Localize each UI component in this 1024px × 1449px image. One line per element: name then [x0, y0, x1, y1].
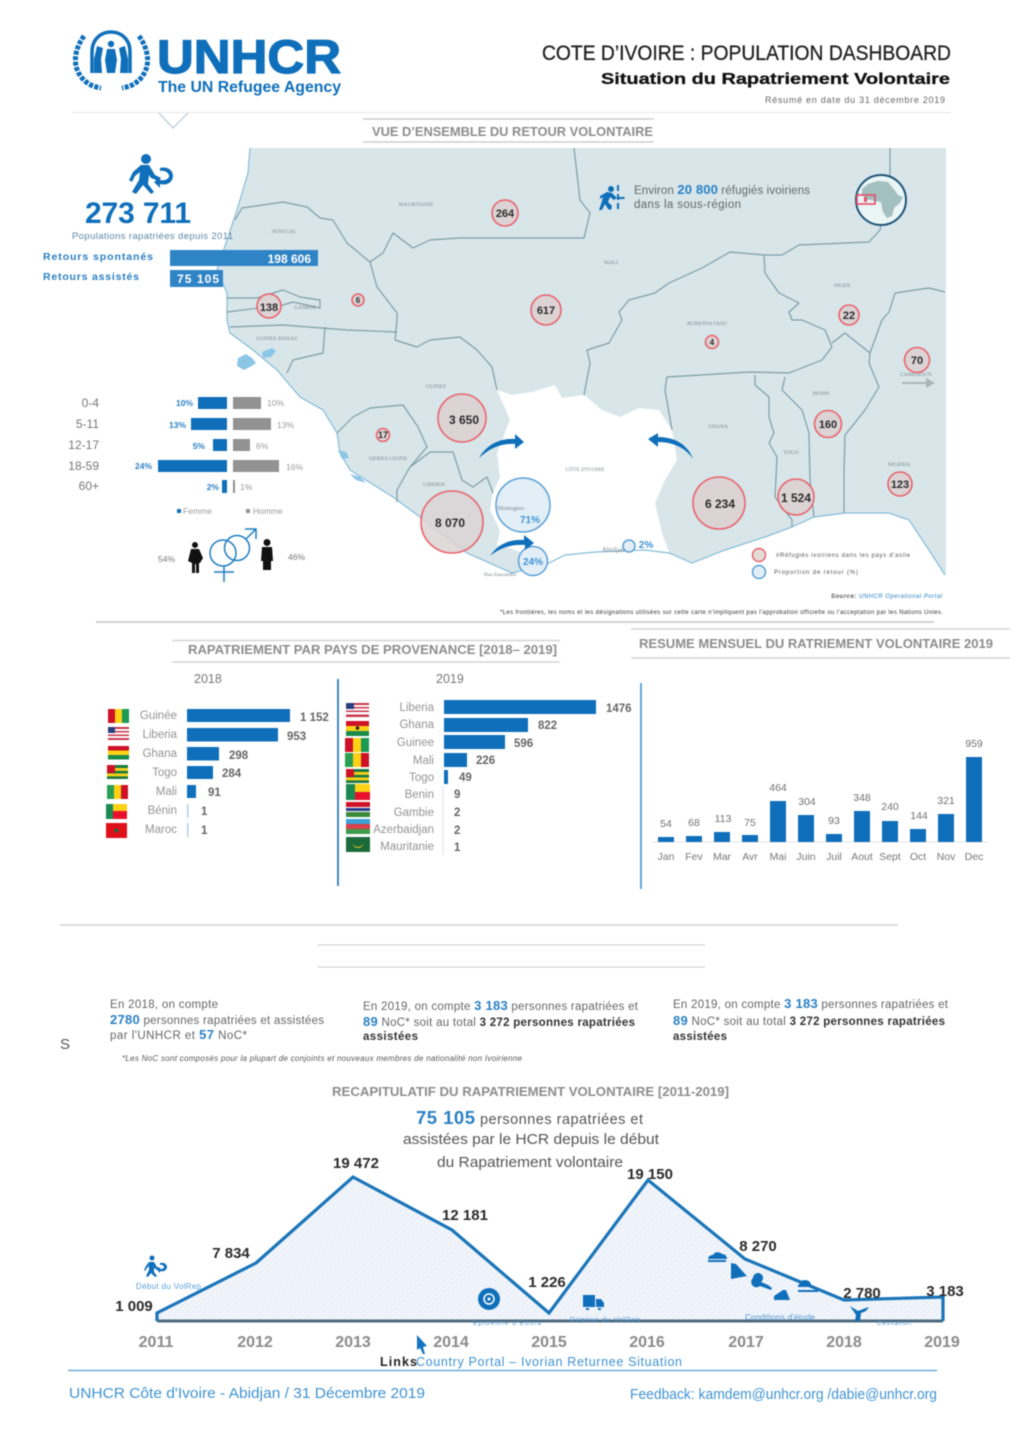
age labels: 5-11: [76, 417, 99, 431]
map footnote: *Les frontières, les noms et les désignations utilisées sur cette carte n'impliquent pas l'approbation officielle ou l'acceptation par les Nations Unies.: [500, 610, 943, 616]
monthly values: 464: [769, 782, 787, 794]
icon: cursor: [417, 1335, 427, 1354]
date line: Résumé en date du 31 décembre 2019: [765, 95, 945, 105]
month labels: Dec: [965, 851, 983, 863]
coast line: [217, 148, 945, 575]
yearly values: 12 181: [442, 1207, 488, 1224]
text block: 2019 left: assistées: [363, 1031, 418, 1043]
footer: feedback: Feedback: kamdem@unhcr.org /dabie@unhcr.org: [630, 1386, 937, 1403]
chart: annual returns area: [115, 1155, 964, 1351]
panel: total returns: [43, 154, 318, 287]
country labels: CAMEROUN: [900, 372, 932, 378]
heading: vue d'ensemble: VUE D’ENSEMBLE DU RETOUR VOLONTAIRE: [372, 125, 653, 139]
age labels: 12-17: [68, 438, 99, 452]
map borders: [227, 148, 945, 527]
gender split: [158, 529, 305, 582]
country labels: LIBERIA: [423, 482, 445, 488]
country labels: GAMBIE: [294, 305, 316, 311]
icon: start of return: [144, 1256, 167, 1277]
values 2018: [201, 712, 329, 837]
blue circles: return proportion: 24%: [523, 557, 543, 568]
red circles: refugees by country: 6: [356, 296, 361, 305]
age labels: 60+: [79, 479, 99, 493]
year label 2019: 2019: [436, 672, 464, 686]
footer: office: UNHCR Côte d'Ivoire - Abidjan / 31 Décembre 2019: [69, 1385, 425, 1402]
gender split: 54%: [158, 554, 175, 564]
values 2018: 1: [201, 825, 208, 837]
bar assisted: 75 105: [177, 272, 219, 286]
icon: UNHCR emblem: [75, 32, 148, 88]
country labels: MAURITANIE: [399, 202, 434, 208]
monthly bars: [658, 757, 982, 842]
month labels: Jan: [658, 851, 675, 863]
annotation: start of return: Début du VolRep: [136, 1282, 202, 1291]
country labels: MALI: [604, 260, 618, 266]
month labels: Juin: [796, 851, 816, 863]
map panel: [217, 148, 946, 616]
country labels 2019: Gambie: [394, 807, 434, 819]
values 2019: 226: [476, 755, 495, 767]
male bars: [233, 397, 279, 493]
panel: bars 2019: [345, 672, 632, 855]
red circles: refugees by country: 3 650: [449, 413, 479, 427]
gender split: 46%: [288, 552, 305, 562]
month labels: Oct: [910, 851, 926, 863]
text block: recap statement: assistées par le HCR depuis le début: [403, 1132, 659, 1148]
red circles: refugees by country: 4: [710, 338, 715, 347]
age labels: 0-4: [82, 396, 99, 410]
monthly values: 304: [798, 796, 816, 808]
values 2019: [454, 703, 632, 854]
icon: dove: [850, 1306, 869, 1321]
logo tagline: The UN Refugee Agency: [158, 79, 341, 96]
monthly values: 321: [937, 795, 955, 807]
month labels: Mai: [770, 851, 786, 863]
icon: truck: [583, 1295, 604, 1310]
female bars: [158, 397, 227, 493]
annotation: epidemic: Epidémie d'Ebola: [473, 1320, 541, 1327]
yearly values: [115, 1155, 964, 1315]
stray letter: S: [60, 1036, 70, 1053]
text block: 2019 right: 89 NoC* soit au total 3 272 personnes rapatriées: [673, 1013, 945, 1028]
country labels: NIGER: [834, 283, 851, 289]
big number: 273 711: [85, 197, 191, 230]
country labels: BENIN: [813, 391, 829, 397]
blue circles: return proportion: 2%: [639, 540, 653, 551]
white cote d'ivoire label: abidjan: Abidjan: [602, 546, 625, 554]
yearly values: 8 270: [739, 1238, 777, 1255]
country labels: Bas-Sassandra: [484, 572, 517, 578]
bar spontaneous: 198 606: [268, 252, 311, 266]
country labels 2019: Mali: [413, 755, 434, 767]
country labels: TOGO: [783, 450, 799, 456]
year axis: 2011: [139, 1334, 173, 1351]
legend: Homme: [253, 506, 283, 516]
values 2018: 284: [222, 768, 242, 780]
heading: monthly summary: RESUME MENSUEL DU RATRIEMENT VOLONTAIRE 2019: [639, 637, 993, 651]
yearly values: 1 009: [115, 1298, 153, 1315]
year axis: 2013: [335, 1334, 371, 1351]
country labels: CÔTE D'IVOIRE: [565, 465, 605, 473]
yearly values: 3 183: [926, 1283, 964, 1300]
inset globe: [856, 175, 906, 225]
values 2019: 596: [514, 738, 533, 750]
month labels: Mar: [713, 851, 732, 863]
map legend: [752, 548, 911, 578]
month labels: Sept: [879, 851, 901, 863]
country labels 2018: Maroc: [145, 824, 177, 836]
month labels: Aout: [851, 851, 873, 863]
caption: Populations rapatriées depuis 2011: [72, 231, 233, 242]
icon: returning person: [129, 154, 173, 194]
text block: 2019 right: [673, 996, 949, 1043]
values 2018: 1 152: [300, 712, 329, 724]
map arrow cameroun: [902, 378, 935, 388]
values 2019: 49: [459, 772, 472, 784]
chart: monthly returns: [652, 738, 988, 863]
country labels 2018: Mali: [156, 786, 177, 798]
map legend: #Réfugiés ivoiriens dans les pays d'asile: [776, 553, 911, 559]
monthly values: [660, 738, 983, 830]
heading: recap: RECAPITULATIF DU RAPATRIEMENT VOLONTAIRE [2011-2019]: [332, 1085, 729, 1099]
monthly values: 144: [910, 810, 928, 822]
values 2019: 1: [454, 842, 461, 854]
text block: 2019 left: En 2019, on compte 3 183 personnes rapatriées et: [363, 998, 639, 1013]
yearly values: 7 834: [212, 1245, 250, 1262]
monthly values: 68: [688, 817, 700, 829]
month labels: Fev: [685, 851, 703, 863]
icon: biohazard: [478, 1288, 500, 1310]
country labels 2019: Mauritanie: [380, 841, 434, 853]
female percentages: 13%: [169, 420, 186, 430]
year axis: 2016: [629, 1334, 665, 1351]
icon: displaced people: [599, 185, 625, 210]
bars 2019: [444, 700, 596, 784]
year axis: 2015: [531, 1334, 567, 1351]
country labels 2018: [140, 710, 178, 836]
country labels: NIGERIA: [888, 462, 910, 468]
monthly values: 113: [715, 813, 732, 825]
footer: [69, 1385, 937, 1403]
blue circles: return proportion: [496, 478, 653, 576]
country labels 2018: Togo: [152, 767, 177, 779]
red circles: refugees by country: 70: [911, 355, 923, 367]
country labels 2019: Benin: [405, 789, 434, 801]
red circles: refugees by country: [257, 200, 930, 553]
bar assisted: [170, 270, 223, 287]
note NoC: *Les NoC sont composés pour la plupart de conjoints et nouveaux membres de nationalité non Ivoirienne: [122, 1054, 523, 1063]
callout: refugees in sub-region: [634, 182, 810, 211]
title: COTE D’IVOIRE : POPULATION DASHBOARD: [542, 42, 951, 65]
callout: refugees in sub-region: dans la sous-région: [634, 199, 741, 211]
female percentages: 2%: [207, 482, 219, 492]
text block: 2019 right: assistées: [673, 1031, 727, 1043]
yearly values: 19 472: [333, 1155, 379, 1172]
month labels: Nov: [937, 851, 956, 863]
text block: 2019 right: En 2019, on compte 3 183 personnes rapatriées et: [673, 996, 949, 1011]
callout: refugees in sub-region: Environ 20 800 réfugiés ivoiriens: [634, 182, 810, 197]
monthly values: 54: [660, 818, 672, 830]
country labels 2019: Azerbaidjan: [373, 824, 434, 836]
year axis: 2014: [433, 1334, 469, 1351]
annotation: logistics: Reprise du VolRep: [570, 1317, 640, 1324]
country labels: GHANA: [708, 424, 728, 430]
red circles: refugees by country: 8 070: [435, 516, 465, 530]
values 2019: 822: [538, 720, 557, 732]
year label 2018: 2018: [194, 672, 222, 686]
country labels 2019: Togo: [409, 772, 434, 784]
values 2019: 9: [454, 789, 460, 801]
red circles: refugees by country: 617: [537, 305, 555, 317]
values 2019: 2: [454, 825, 460, 837]
legend: [177, 506, 283, 516]
age labels: 18-59: [68, 459, 99, 473]
yearly values: 1 226: [528, 1274, 566, 1291]
logo: UNHCR: [75, 30, 341, 96]
country labels: SIERRA LEONE: [369, 456, 408, 462]
country labels 2019: Ghana: [399, 719, 435, 731]
icon: conditions of return: [708, 1252, 818, 1300]
year axis: [139, 1334, 960, 1351]
map land: [217, 148, 946, 575]
text block: recap statement: 75 105 personnes rapatriées et: [416, 1107, 643, 1128]
values 2018: 1: [201, 806, 208, 818]
text block: recap statement: du Rapatriement volontaire: [437, 1155, 623, 1171]
month labels: Avr: [742, 851, 758, 863]
monthly values: 240: [881, 801, 899, 813]
icon: woman: [188, 542, 203, 573]
red circles: refugees by country: 17: [378, 430, 388, 440]
yearly values: 2 780: [843, 1285, 881, 1302]
country labels 2019: Liberia: [399, 702, 435, 714]
values 2019: 1476: [606, 703, 632, 715]
map source: Source: UNHCR Operational Portal: [831, 594, 943, 600]
male percentages: 6%: [256, 441, 269, 451]
flags 2019: [345, 703, 370, 852]
links row: Country Portal – Ivorian Returnee Situation: [416, 1355, 682, 1369]
country labels 2018: Ghana: [142, 748, 178, 760]
year axis: 2012: [237, 1334, 273, 1351]
month labels: Juil: [826, 851, 842, 863]
trend line: [157, 1177, 943, 1321]
monthly values: 75: [744, 817, 756, 829]
red circles: refugees by country: 160: [819, 419, 837, 431]
country labels: SENEGAL: [271, 229, 297, 235]
bars 2018: [187, 709, 290, 837]
red circles: refugees by country: 264: [496, 208, 515, 220]
logo wordmark: UNHCR: [157, 30, 341, 83]
red circles: refugees by country: 123: [891, 479, 909, 491]
area fill: [157, 1177, 943, 1321]
text block: 2018: par l'UNHCR et 57 NoC*: [110, 1027, 248, 1042]
text block: 2018: 2780 personnes rapatriées et assistées: [110, 1012, 324, 1027]
female percentages: 10%: [176, 398, 193, 408]
yearly values: 19 150: [627, 1166, 673, 1183]
text block: 2019 left: 89 NoC* soit au total 3 272 personnes rapatriées: [363, 1014, 635, 1029]
year axis: 2018: [826, 1334, 862, 1351]
links row: Links: [380, 1355, 417, 1369]
bar spontaneous: [170, 250, 318, 266]
text block: recap statement: [403, 1107, 659, 1171]
heading: repatriation by country: RAPATRIEMENT PAR PAYS DE PROVENANCE [2018– 2019]: [188, 643, 557, 657]
country labels 2018: Liberia: [142, 729, 178, 741]
panel: bars 2018: [106, 672, 329, 838]
country labels: [256, 202, 932, 578]
map islands: [237, 348, 366, 483]
annotation: peace: Cessation: [877, 1320, 911, 1327]
male percentages: 16%: [286, 462, 303, 472]
chart: age pyramid: [68, 396, 305, 582]
blue circles: return proportion: 71%: [520, 515, 540, 526]
values 2018: 953: [287, 731, 306, 743]
male percentages: 1%: [240, 482, 253, 492]
female percentages: [135, 398, 219, 492]
legend: Femme: [183, 506, 212, 516]
baseline: [157, 1320, 943, 1322]
flags 2018: [106, 709, 129, 838]
female percentages: 5%: [193, 441, 205, 451]
label assisted: Retours assistés: [43, 271, 139, 283]
female percentages: 24%: [135, 461, 152, 471]
red circles: refugees by country: 138: [260, 302, 278, 314]
text block: 2018: [110, 999, 324, 1042]
text block: 2019 left: [363, 998, 639, 1043]
country labels 2019: Guinee: [397, 737, 434, 749]
country labels: GUINEE-BISSAU: [256, 336, 298, 342]
annotation: conditions: Conditions d'étude: [745, 1313, 816, 1322]
text block: 2018: En 2018, on compte: [110, 999, 218, 1011]
country labels 2018: Bénin: [148, 805, 177, 817]
country labels: BURKINA FASO: [687, 321, 727, 327]
male percentages: [240, 398, 303, 492]
return arrows: [479, 433, 693, 556]
blue circles: return proportion: Montagnes: [498, 506, 525, 512]
monthly values: 93: [828, 815, 840, 827]
male percentages: 13%: [277, 420, 294, 430]
subtitle: Situation du Rapatriement Volontaire: [601, 71, 950, 88]
monthly values: 348: [853, 792, 871, 804]
male percentages: 10%: [267, 398, 284, 408]
year axis: 2019: [924, 1334, 960, 1351]
values 2019: 2: [454, 807, 460, 819]
red circles: refugees by country: 1 524: [781, 491, 811, 505]
country labels: GUINEE: [426, 384, 447, 390]
red circles: refugees by country: 6 234: [705, 497, 735, 511]
title block: [542, 42, 951, 105]
country labels 2018: Guinée: [140, 710, 177, 722]
label spontaneous: Retours spontanés: [43, 251, 153, 263]
icon: gender symbols: [210, 529, 256, 582]
age labels: [68, 396, 99, 493]
map legend: Proportion de retour (%): [774, 570, 858, 576]
values 2018: 298: [229, 750, 249, 762]
month labels: [658, 851, 983, 863]
monthly values: 959: [965, 738, 983, 750]
country labels 2019: [373, 702, 435, 853]
values 2018: 91: [208, 787, 221, 799]
red circles: refugees by country: 22: [843, 310, 855, 322]
year axis: 2017: [728, 1334, 764, 1351]
icon: man: [261, 539, 273, 570]
